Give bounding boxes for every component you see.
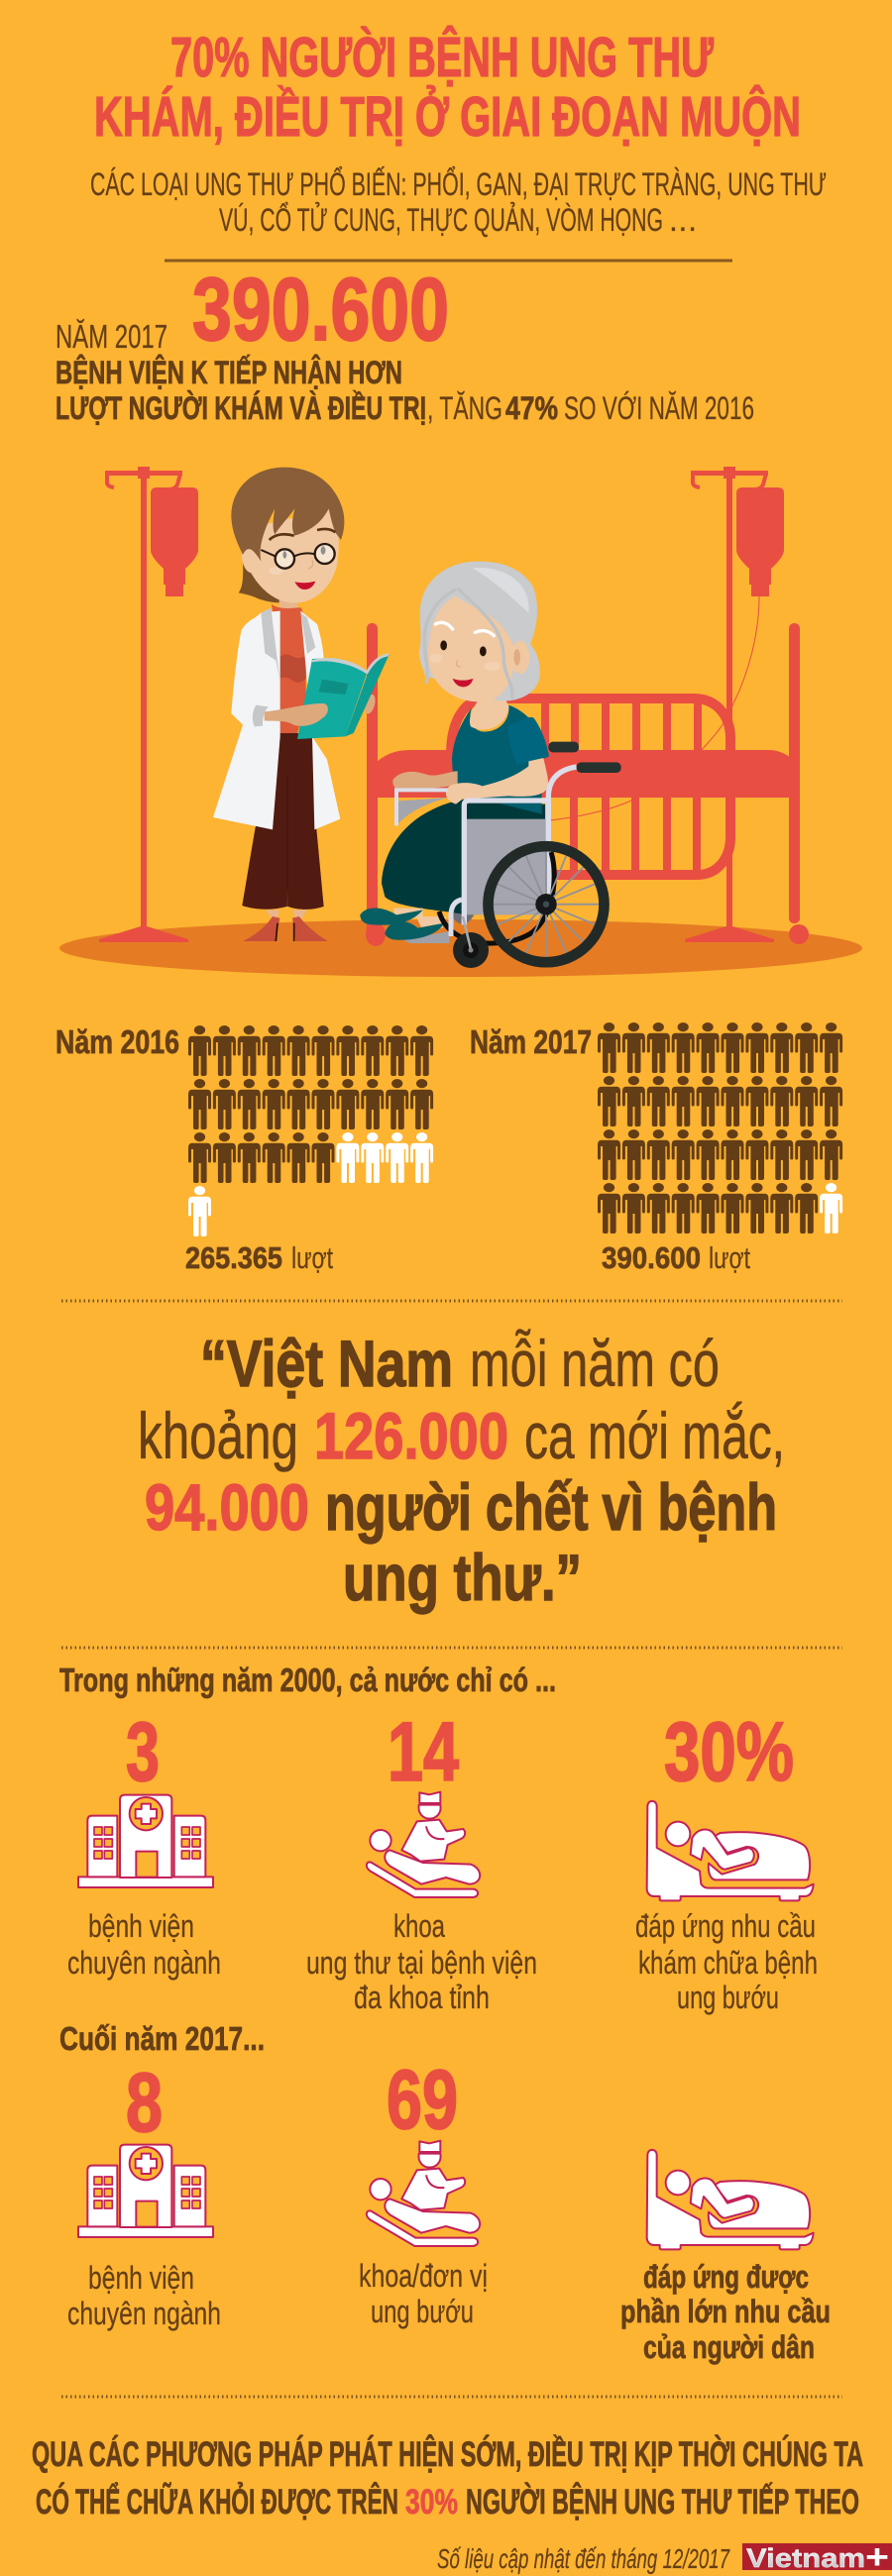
- stat: 30% of demand: đáp ứng nhu cầu: [635, 1908, 816, 1944]
- stat: 30% of demand: ung bướu: [677, 1980, 779, 2015]
- stat: 8 specialist hospitals: 8: [126, 2056, 163, 2149]
- icon: doctor with patient: [367, 1792, 480, 1897]
- subtitle: common cancers: ...: [669, 202, 697, 238]
- stat: 3 specialist hospitals: chuyên ngành: [67, 1945, 221, 1981]
- key figure: 390.600 patients in 2017: 47%: [505, 390, 558, 426]
- stat: 8 specialist hospitals: chuyên ngành: [67, 2296, 221, 2331]
- stat: 8 specialist hospitals: bệnh viện: [88, 2260, 194, 2296]
- doctor: [213, 468, 390, 941]
- key figure: 390.600 patients in 2017: LƯỢT NGƯỜI KHÁM VÀ ĐIỀU TRỊ: [56, 390, 426, 426]
- stat: 14 oncology departments: đa khoa tỉnh: [354, 1980, 490, 2015]
- stat: 30% of demand: khám chữa bệnh: [638, 1945, 818, 1981]
- wheelchair wheels: [439, 846, 605, 968]
- stat: meets most of demand: đáp ứng được: [643, 2259, 809, 2295]
- quote: 94.000: [145, 1470, 309, 1544]
- stat: 69 departments: ung bướu: [371, 2294, 474, 2329]
- logo: Vietnam+: +: [865, 2538, 889, 2576]
- pictogram rows 2016: [188, 1025, 433, 1236]
- people chart: 2017: [470, 1022, 842, 1275]
- pictogram rows 2017: [598, 1022, 842, 1234]
- icon: patient in bed: [647, 2150, 814, 2249]
- stat: 8 specialist hospitals: [67, 2056, 221, 2331]
- quote: “Việt Nam: [200, 1327, 453, 1400]
- stat: 3 specialist hospitals: [67, 1705, 221, 1981]
- icon: doctor with patient: [367, 2141, 480, 2246]
- people chart: 2016: 265.365: [185, 1240, 282, 1275]
- quote: ca mới mắc,: [524, 1399, 785, 1472]
- hospital bed: [366, 596, 809, 946]
- people chart: 2016: Năm 2016: [56, 1023, 179, 1060]
- stat: 14 oncology departments: [306, 1705, 537, 2015]
- stat: 30% of demand: 30%: [664, 1705, 794, 1798]
- stat: 30% of demand: [635, 1705, 818, 2015]
- people chart: 2017: lượt: [709, 1240, 750, 1275]
- icon: hospital: [78, 2145, 213, 2237]
- stat: 69 departments: khoa/đơn vị: [359, 2258, 488, 2294]
- key figure: 390.600 patients in 2017: 390.600: [192, 261, 449, 360]
- quote: 126.000: [314, 1399, 508, 1472]
- stat: 14 oncology departments: ung thư tại bệnh viện: [306, 1945, 537, 1981]
- title: [94, 25, 801, 149]
- icon: patient in bed: [647, 1801, 814, 1900]
- stat: meets most of demand: [620, 2150, 831, 2365]
- key figure: 390.600 patients in 2017: , TĂNG: [427, 390, 502, 426]
- people chart: 2017: 390.600: [602, 1240, 701, 1275]
- quote: ung thư.”: [343, 1541, 582, 1614]
- stat: meets most of demand: của người dân: [643, 2329, 815, 2365]
- key figure: 390.600 patients in 2017: NĂM 2017: [56, 318, 167, 355]
- logo: Vietnam+: [742, 2538, 892, 2576]
- source note: Số liệu cập nhật đến tháng 12/2017: [437, 2543, 730, 2574]
- key figure: 390.600 patients in 2017: SO VỚI NĂM 2016: [564, 390, 754, 426]
- key figure: 390.600 patients in 2017: [56, 261, 754, 426]
- quote: khoảng: [138, 1399, 298, 1472]
- people chart: 2017: Năm 2017: [470, 1023, 592, 1060]
- quote: [138, 1327, 785, 1614]
- key figure: 390.600 patients in 2017: BỆNH VIỆN K TIẾP NHẬN HƠN: [56, 355, 402, 390]
- illustration: doctor and patient in wheelchair: [59, 467, 862, 977]
- closing statement: [32, 2434, 863, 2522]
- logo: Vietnam+: Vietnam: [746, 2543, 865, 2573]
- icon: hospital: [78, 1795, 213, 1887]
- people chart: 2016: [56, 1023, 433, 1275]
- book held by doctor: [297, 653, 390, 739]
- closing statement: CÓ THỂ CHỮA KHỎI ĐƯỢC TRÊN: [36, 2482, 398, 2522]
- stat: 3 specialist hospitals: bệnh viện: [88, 1908, 194, 1944]
- patient in wheelchair: [360, 562, 621, 943]
- subtitle: common cancers: VÚ, CỔ TỬ CUNG, THỰC QUẢN, VÒM HỌNG: [219, 202, 663, 238]
- stat: meets most of demand: phần lớn nhu cầu: [620, 2294, 831, 2329]
- stat: 69 departments: 69: [387, 2053, 458, 2146]
- section heading: end of 2017: Cuối năm 2017...: [59, 2020, 265, 2057]
- people chart: 2016: lượt: [291, 1240, 333, 1275]
- stat: 3 specialist hospitals: 3: [126, 1705, 160, 1798]
- stat: 69 departments: [359, 2053, 488, 2329]
- stat: 14 oncology departments: 14: [388, 1705, 459, 1798]
- section heading: in the 2000s: Trong những năm 2000, cả nước chỉ có ...: [59, 1662, 556, 1698]
- stat: 14 oncology departments: khoa: [393, 1908, 445, 1944]
- subtitle: common cancers: [90, 166, 827, 238]
- quote: mỗi năm có: [470, 1327, 720, 1400]
- closing statement: 30%: [405, 2483, 458, 2522]
